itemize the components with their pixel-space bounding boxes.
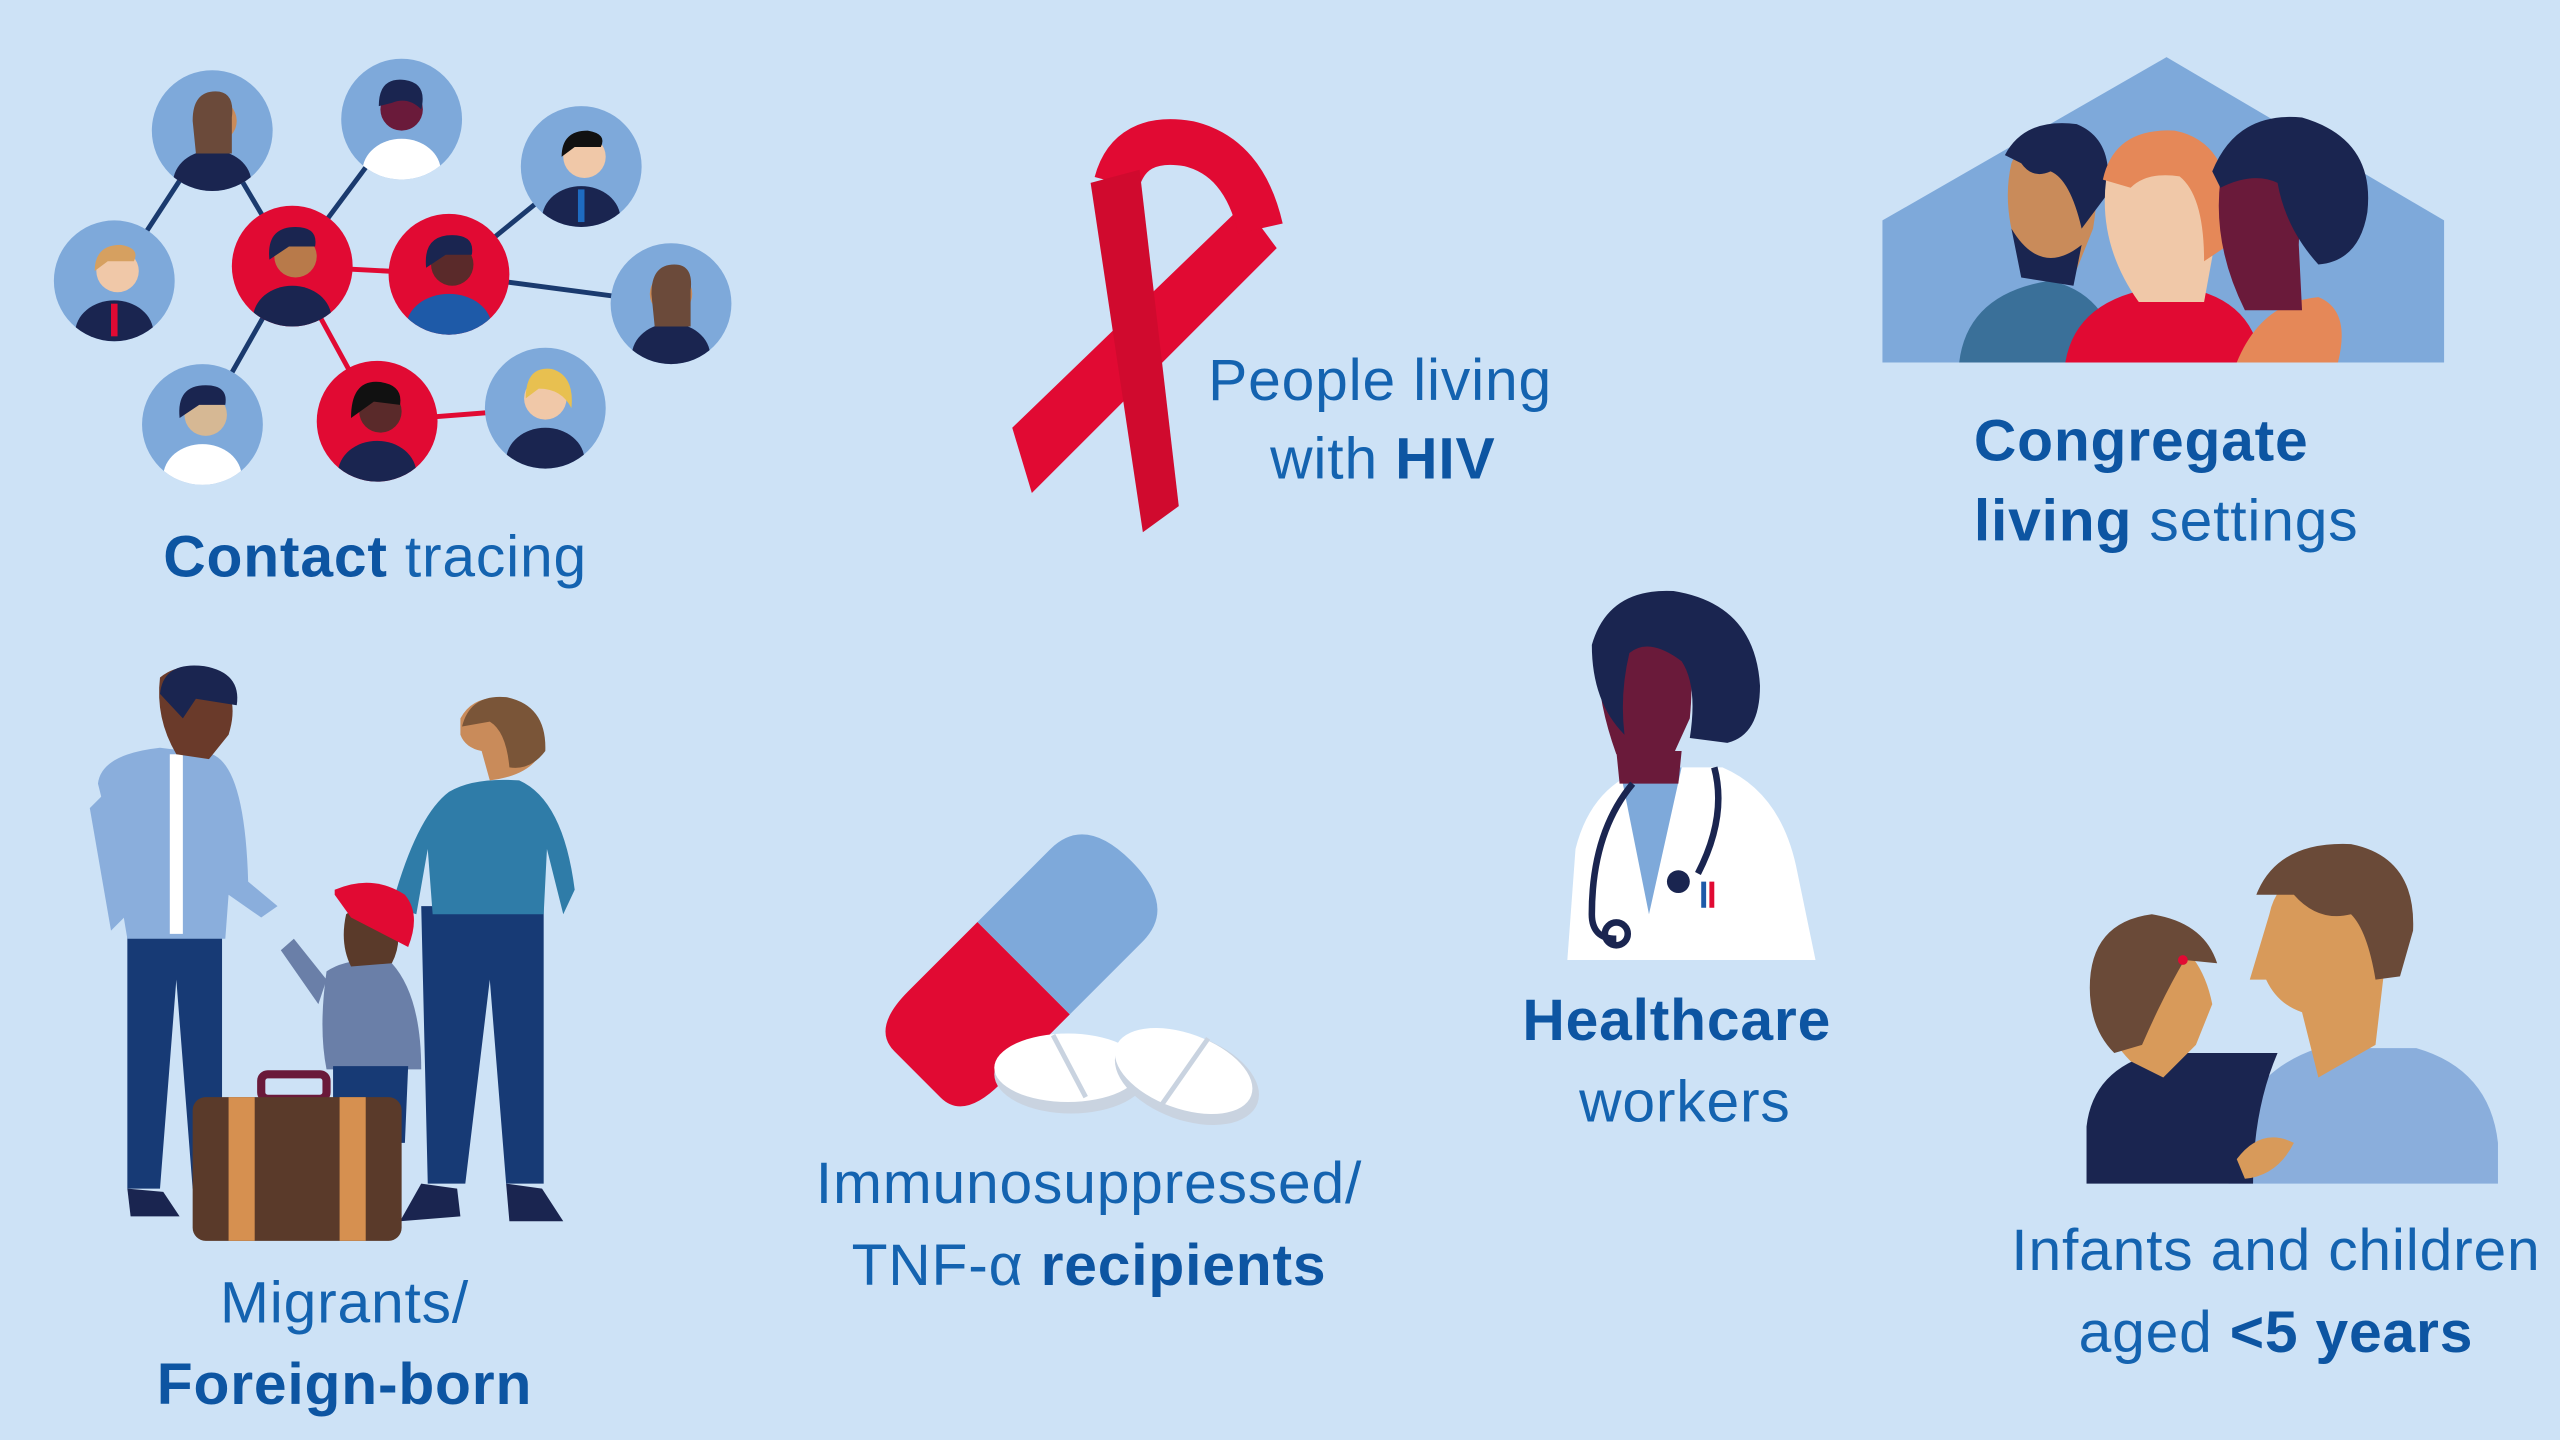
label: immunosuppressed: TNF-α recipients xyxy=(852,1233,1326,1298)
panel: HIV xyxy=(1012,142,1552,532)
icon: capsule and pills xyxy=(871,815,1272,1143)
label: infants xyxy=(2011,1218,2541,1365)
panel: congregate living xyxy=(1882,57,2444,553)
label: infants: Infants and children xyxy=(2011,1218,2541,1283)
label: immunosuppressed xyxy=(816,1151,1362,1298)
label: healthcare: workers xyxy=(1578,1070,1791,1135)
label: HIV xyxy=(1208,348,1552,491)
label: congregate: Congregate xyxy=(1974,408,2309,473)
network lines xyxy=(114,119,671,424)
panel: infants and children xyxy=(2011,844,2541,1365)
icon: doctor xyxy=(1567,591,1816,960)
label: congregate xyxy=(1974,408,2358,553)
label: immunosuppressed: Immunosuppressed/ xyxy=(816,1151,1362,1216)
panel: healthcare workers xyxy=(1522,591,1831,1135)
label: healthcare xyxy=(1522,988,1831,1135)
label: HIV: with HIV xyxy=(1269,426,1496,491)
label: contact tracing: Contact tracing xyxy=(163,524,587,589)
avatars xyxy=(54,59,731,509)
panel: contact tracing xyxy=(54,59,731,589)
label: congregate: living settings xyxy=(1974,488,2358,553)
icon: red ribbon xyxy=(1012,142,1277,532)
icon: house with people xyxy=(1882,57,2444,362)
icon: parent and child xyxy=(2087,844,2498,1184)
label: migrants: Foreign-born xyxy=(157,1352,532,1417)
label: HIV: People living xyxy=(1208,348,1552,413)
label: healthcare: Healthcare xyxy=(1522,988,1831,1053)
label: migrants: Migrants/ xyxy=(220,1270,469,1335)
panel: migrants xyxy=(90,665,575,1417)
panel: immunosuppressed xyxy=(816,815,1362,1298)
icon: family with suitcase xyxy=(90,665,575,1241)
label: migrants xyxy=(157,1270,532,1417)
label: infants: aged <5 years xyxy=(2079,1300,2473,1365)
